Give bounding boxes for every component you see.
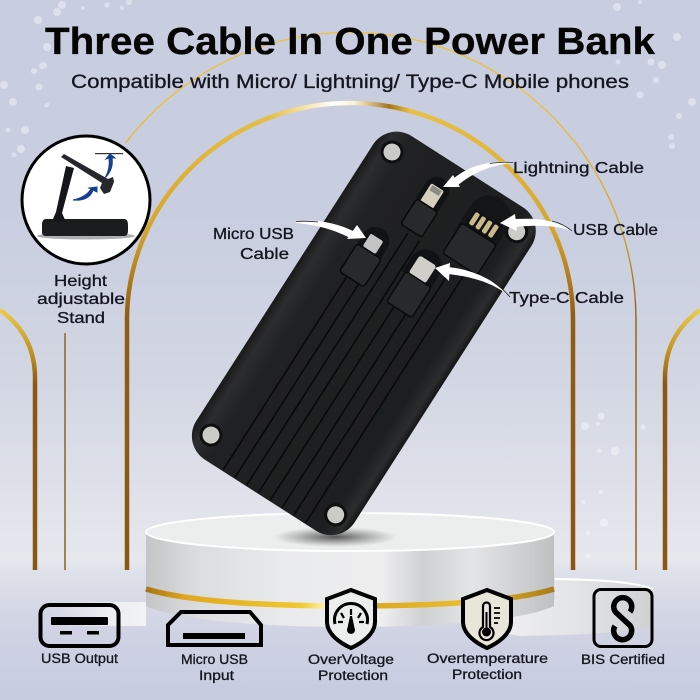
stand arm <box>53 166 74 222</box>
podium lower step <box>50 578 653 636</box>
arrow: type-C cable <box>435 263 510 297</box>
stand label: adjustable <box>37 291 125 308</box>
micro USB cable head <box>339 222 396 287</box>
title: Three Cable In One Power Bank <box>45 21 656 63</box>
arrow: USB cable <box>500 214 572 231</box>
icon: overvoltage shield <box>327 590 375 648</box>
lightning cable head <box>400 172 455 237</box>
label: micro USB input: Micro USB <box>181 652 248 667</box>
label: USB cable: USB Cable <box>573 222 658 239</box>
type-C cable head <box>384 243 448 318</box>
screws <box>197 138 530 529</box>
stand photo circle <box>22 136 150 264</box>
arrow: micro USB cable <box>296 221 366 239</box>
label: overvoltage protection: Protection <box>318 668 388 683</box>
label: lightning cable: Lightning Cable <box>513 160 644 177</box>
label: micro USB input: Input <box>199 668 234 683</box>
phone holder <box>61 154 114 194</box>
label: type-C cable: Type-C Cable <box>509 290 624 307</box>
stand base <box>42 219 128 236</box>
label: micro USB cable: Cable <box>240 246 289 263</box>
stand label: Height <box>54 273 108 290</box>
label: micro USB input <box>181 652 248 683</box>
label: overvoltage protection <box>308 652 394 683</box>
stand label: Stand <box>57 310 105 327</box>
cable grooves <box>223 218 467 523</box>
gold arches <box>0 32 700 570</box>
label: micro USB cable <box>213 226 294 263</box>
icon: micro USB input <box>168 612 261 645</box>
arrow: blue curved right <box>73 187 97 200</box>
height limit line <box>95 153 123 154</box>
stand shadow <box>37 232 135 240</box>
icon: overtemperature shield <box>463 590 511 648</box>
power bank body <box>181 121 546 546</box>
podium <box>146 513 554 627</box>
label: overtemperature protection <box>427 651 548 682</box>
icon: BIS certified <box>594 590 652 646</box>
label: BIS certified: BIS Certified <box>581 652 665 667</box>
stand label <box>37 273 125 327</box>
icon: USB output <box>40 605 118 646</box>
decorative bubbles <box>0 0 696 558</box>
label: overtemperature protection: Protection <box>452 667 522 682</box>
arrow: lightning cable <box>443 162 513 187</box>
label: micro USB cable: Micro USB <box>213 226 294 243</box>
label: overtemperature protection: Overtemperature <box>427 651 548 666</box>
power bank <box>181 121 546 546</box>
arrow: blue curved up <box>105 154 115 178</box>
label: overvoltage protection: OverVoltage <box>308 652 394 667</box>
label: USB output: USB Output <box>41 651 118 666</box>
subtitle: Compatible with Micro/ Lightning/ Type-C Mobile phones <box>71 72 629 93</box>
USB cable head <box>441 187 519 276</box>
